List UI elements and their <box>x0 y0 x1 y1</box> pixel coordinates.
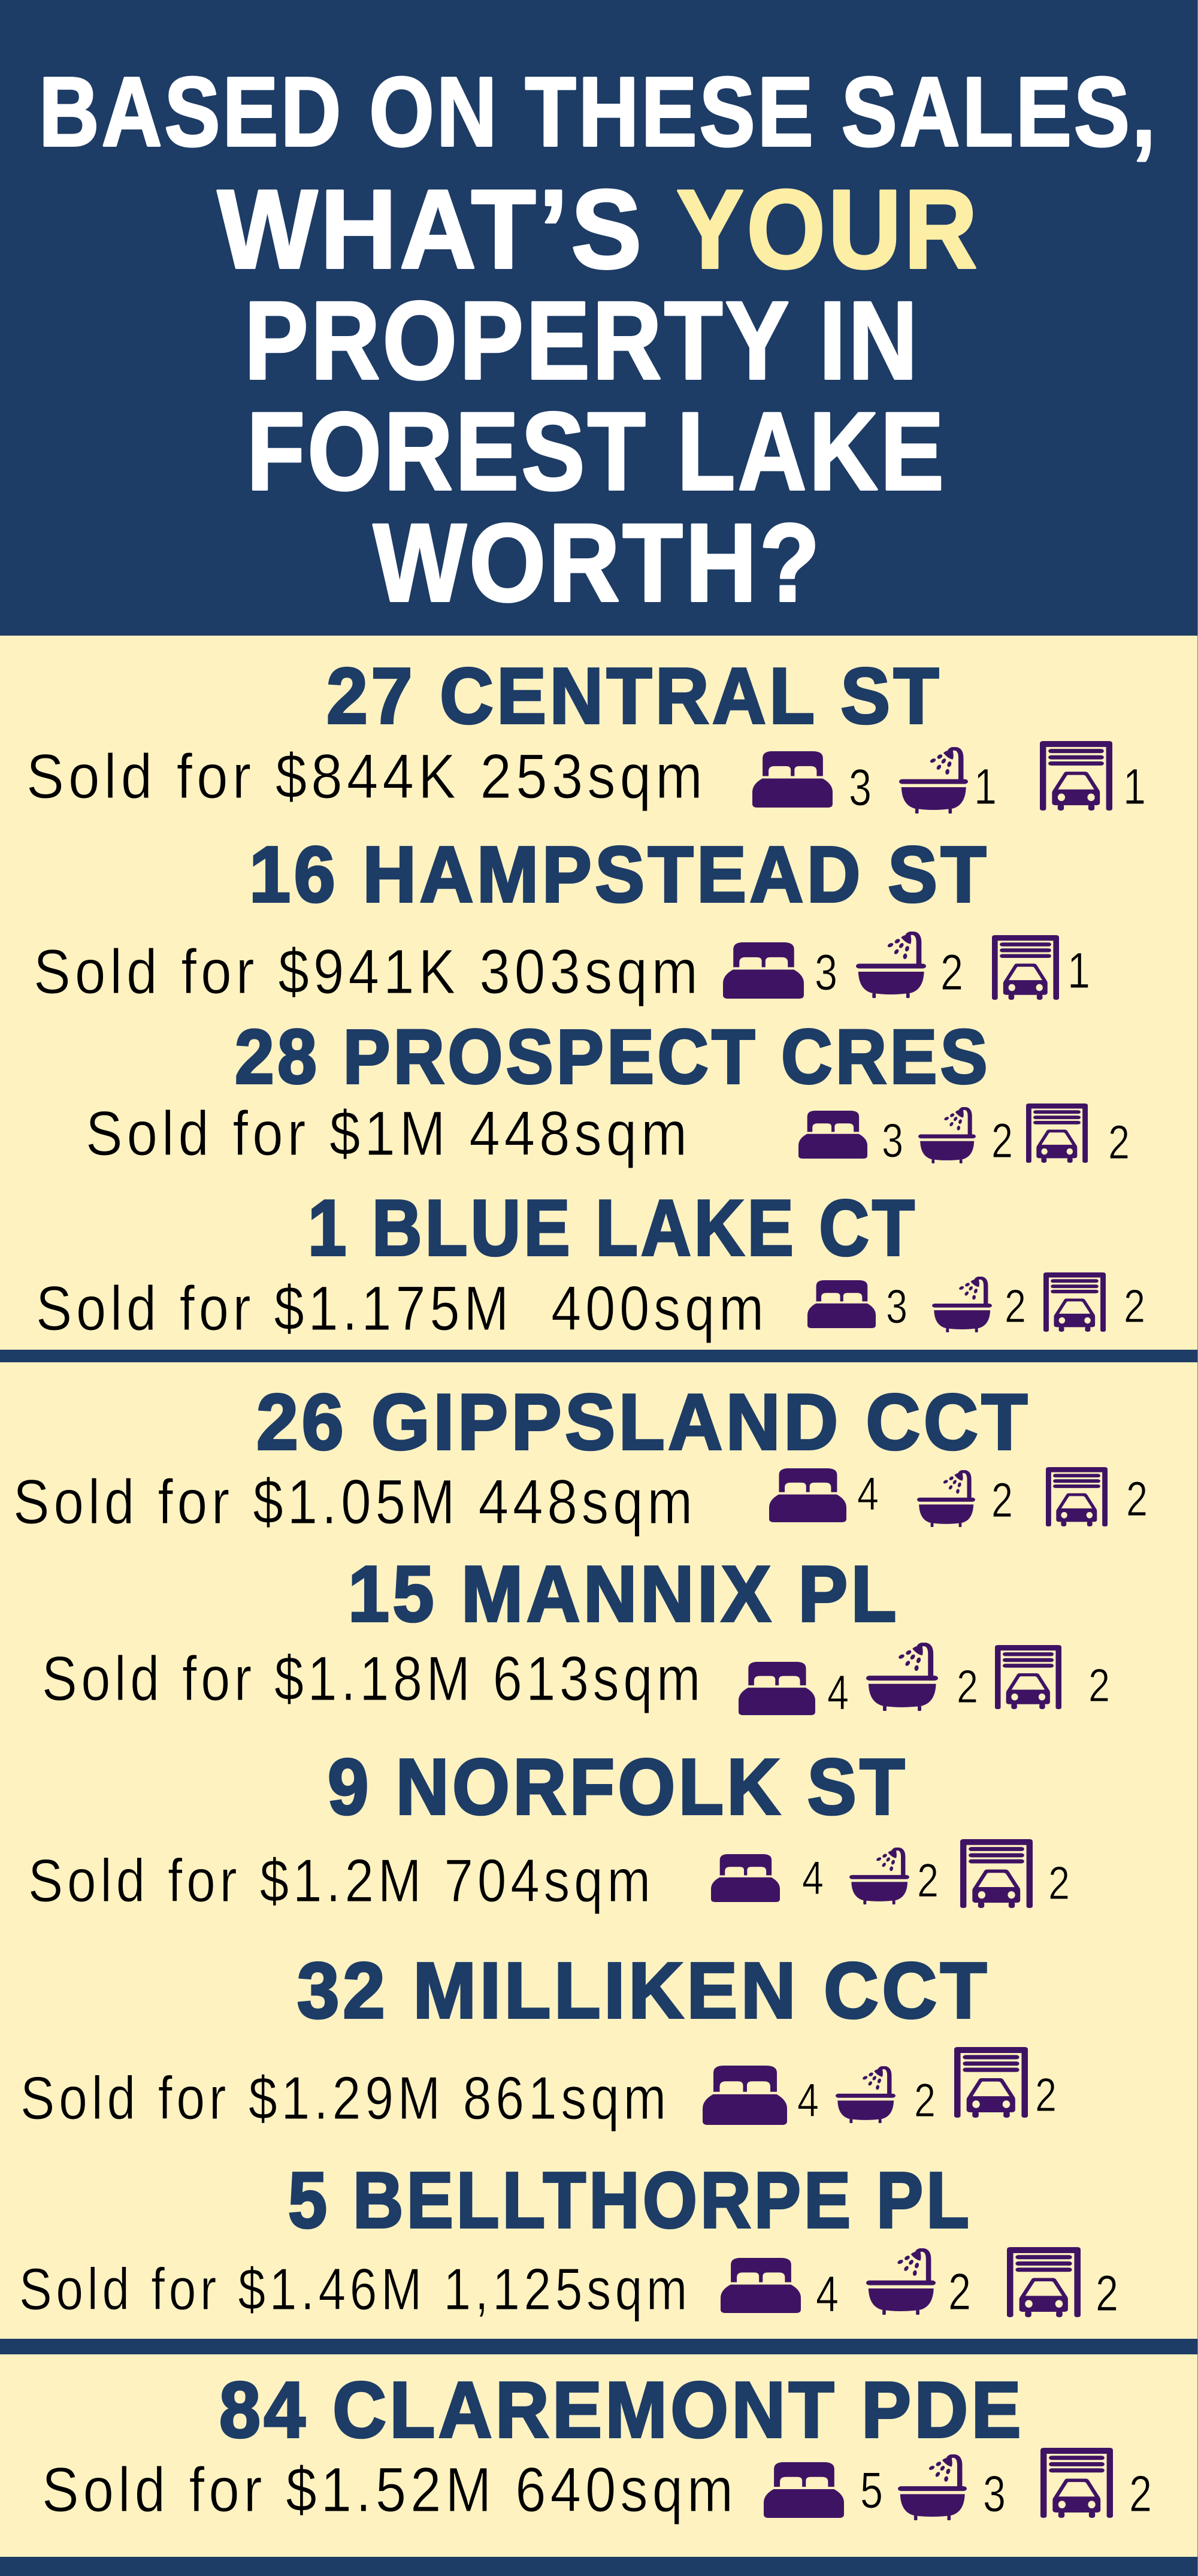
bedrooms: 3 <box>882 1114 903 1167</box>
bathrooms: 2 <box>940 944 963 1000</box>
sale details: Sold for $1.175M 400sqm <box>36 1274 768 1344</box>
address: 26 GIPPSLAND CCT <box>256 1378 1031 1466</box>
address: 84 CLAREMONT PDE <box>219 2366 1024 2454</box>
bedrooms: 4 <box>797 2073 819 2127</box>
sale: 28 Prospect Cres <box>86 1014 1130 1169</box>
title line 3: PROPERTY IN <box>244 279 920 403</box>
address: 1 BLUE LAKE CT <box>308 1184 918 1272</box>
icon: bed <box>752 751 833 808</box>
sale: 32 Milliken Cct <box>20 1946 1057 2132</box>
bathrooms: 2 <box>991 1473 1013 1528</box>
car spaces: 1 <box>1067 942 1090 999</box>
car spaces: 2 <box>1096 2265 1118 2321</box>
sale details: Sold for $1M 448sqm <box>86 1099 691 1169</box>
icon: garage <box>1040 2448 1113 2518</box>
car spaces: 2 <box>1088 1659 1110 1712</box>
sale details: Sold for $1.29M 861sqm <box>20 2065 670 2132</box>
icon: bath <box>836 2067 896 2123</box>
title <box>39 57 1158 625</box>
footer bar <box>0 2557 1198 2576</box>
bathrooms: 1 <box>974 758 997 815</box>
bathrooms: 2 <box>957 1660 978 1713</box>
bathrooms: 2 <box>1005 1280 1026 1332</box>
car spaces: 2 <box>1124 1280 1145 1332</box>
icon: bath <box>932 1278 992 1332</box>
icon: bed <box>807 1280 876 1328</box>
icon: bath <box>856 933 926 998</box>
sale: 1 Blue Lake Ct <box>36 1184 1145 1344</box>
icon: garage <box>1026 1103 1088 1163</box>
icon: bath <box>917 1471 975 1527</box>
address: 28 PROSPECT CRES <box>235 1014 991 1100</box>
sale: 15 Mannix Pl <box>42 1550 1110 1720</box>
bathrooms: 2 <box>948 2263 971 2321</box>
address: 27 CENTRAL ST <box>326 652 942 740</box>
header panel <box>0 0 1198 636</box>
icon: garage <box>1007 2247 1081 2317</box>
bathrooms: 2 <box>991 1114 1013 1168</box>
bathrooms: 2 <box>917 1854 939 1907</box>
car spaces: 2 <box>1048 1857 1070 1909</box>
address: 32 MILLIKEN CCT <box>297 1946 990 2034</box>
icon: garage <box>992 935 1059 1000</box>
icon: garage <box>1043 1272 1106 1332</box>
icon: bath <box>866 2250 936 2315</box>
icon: garage <box>1046 1467 1108 1526</box>
car spaces: 2 <box>1108 1115 1130 1169</box>
bedrooms: 4 <box>802 1851 824 1904</box>
bedrooms: 3 <box>849 759 872 817</box>
address: 15 MANNIX PL <box>348 1550 900 1638</box>
sale: 5 Bellthorpe Pl <box>19 2156 1118 2322</box>
sale details: Sold for $1.52M 640sqm <box>42 2455 737 2525</box>
sale: 27 Central St <box>26 652 1146 817</box>
icon: bed <box>721 2258 801 2313</box>
sale details: Sold for $1.18M 613sqm <box>42 1644 704 1714</box>
title line 4: FOREST LAKE <box>247 390 946 513</box>
car spaces: 2 <box>1129 2466 1152 2523</box>
icon: bath <box>866 1644 938 1711</box>
bathrooms: 2 <box>914 2073 936 2127</box>
icon: bed <box>798 1111 867 1159</box>
sale details: Sold for $941K 303sqm <box>34 937 702 1007</box>
bedrooms: 3 <box>815 944 837 1000</box>
sale: 84 Claremont Pde <box>42 2366 1152 2525</box>
icon: garage <box>1040 741 1112 811</box>
bedrooms: 4 <box>857 1467 879 1520</box>
right edge line <box>1197 0 1198 2576</box>
section divider <box>0 1350 1198 1362</box>
bedrooms: 4 <box>816 2266 839 2322</box>
address: 16 HAMPSTEAD ST <box>249 830 990 918</box>
icon: bed <box>769 1468 846 1522</box>
sale details: Sold for $844K 253sqm <box>26 742 707 812</box>
icon: bed <box>723 942 804 999</box>
sale: 16 Hampstead St <box>34 830 1090 1007</box>
sale: 9 Norfolk St <box>28 1743 1070 1915</box>
icon: bath <box>899 749 968 814</box>
sale details: Sold for $1.05M 448sqm <box>13 1467 697 1537</box>
car spaces: 2 <box>1035 2068 1057 2121</box>
sale details: Sold for $1.2M 704sqm <box>28 1848 655 1915</box>
icon: garage <box>995 1645 1061 1709</box>
icon: bed <box>739 1662 815 1715</box>
icon: bed <box>764 2462 844 2518</box>
bedrooms: 5 <box>860 2462 883 2519</box>
address: 9 NORFOLK ST <box>328 1743 908 1831</box>
icon: bath <box>918 1108 976 1163</box>
car spaces: 2 <box>1126 1472 1148 1526</box>
icon: bath <box>849 1849 909 1904</box>
sale: 26 Gippsland Cct <box>13 1378 1148 1537</box>
icon: bed <box>711 1854 780 1902</box>
section divider <box>0 2339 1198 2354</box>
icon: garage <box>960 1839 1033 1908</box>
icon: garage <box>954 2047 1028 2118</box>
highlighted word: your: YOUR <box>676 167 980 292</box>
bathrooms: 3 <box>983 2466 1006 2523</box>
icon: bed <box>703 2066 787 2125</box>
icon: bath <box>898 2456 967 2520</box>
sale details: Sold for $1.46M 1,125sqm <box>19 2256 691 2322</box>
title line 2: WHAT’S <box>217 167 645 292</box>
bedrooms: 3 <box>886 1280 907 1333</box>
address: 5 BELLTHORPE PL <box>288 2156 972 2244</box>
bedrooms: 4 <box>827 1665 849 1720</box>
car spaces: 1 <box>1123 758 1146 815</box>
title line 5: WORTH? <box>373 501 822 625</box>
